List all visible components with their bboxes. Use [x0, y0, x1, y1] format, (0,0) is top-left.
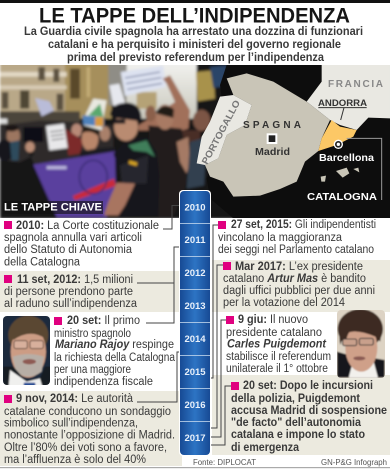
timeline: 2011 — [184, 235, 206, 246]
timeline: 2010 — [184, 202, 206, 214]
buildings — [0, 65, 226, 126]
purple banner — [33, 151, 116, 217]
event: 20 set (Puigdemont): 20 set: Dopo le incursioni — [243, 380, 373, 392]
Madrid marker — [267, 133, 277, 144]
event: 9 nov 2014: 9 nov, 2014: Le autorità — [16, 393, 134, 405]
event: 11 set 2012: di persone prendono parte — [4, 286, 133, 298]
event: 11 set 2012: 11 set, 2012: 1,5 milioni — [17, 274, 133, 286]
event: 27 set 2015: 27 set, 2015: Gli indipendentisti — [231, 219, 376, 231]
Barcelona marker — [334, 140, 343, 149]
event: 27 set 2015: dei seggi nel Parlamento catalano — [218, 244, 374, 256]
event: 9 giu: stabilisce il referendum — [226, 351, 331, 363]
background bands — [0, 218, 390, 468]
event: 11 set 2012: al raduno sull’indipendenza — [4, 298, 138, 310]
map: Catalonia — [318, 120, 357, 151]
Andorra pointer — [318, 108, 367, 120]
connector lines — [137, 206, 231, 445]
panel: protest photo — [0, 62, 240, 219]
event: 2010 — [4, 220, 159, 268]
event: 2010: della Catalogna — [4, 256, 81, 268]
event: 9 giu: unilaterale il 1° ottobre — [226, 363, 328, 375]
map: Balearic islands — [321, 168, 359, 182]
event: 20 set (Rajoy): la richiesta della Catalogna — [54, 352, 176, 364]
event: 20 set (Rajoy): per una maggiore — [54, 364, 131, 376]
photo: Carles Puigdemont — [337, 310, 385, 378]
label: Andorra: ANDORRA — [318, 98, 367, 109]
event: 20 set (Rajoy): 20 set: Il primo — [67, 315, 140, 327]
event: 2010: dello Statuto di Autonomia — [4, 244, 133, 256]
event: 9 nov 2014: ma l’affluenza è solo del 40% — [4, 454, 146, 466]
event: Mar 2017: catalano Artur Mas è bandito — [223, 273, 366, 285]
label: Portogallo: PORTOGALLO — [200, 99, 243, 166]
timeline: 2017 — [184, 433, 206, 444]
source credit: Fonte: DIPLOCAT — [193, 458, 256, 467]
protester — [138, 75, 210, 217]
label: Madrid: Madrid — [255, 147, 290, 158]
event: 20 set (Puigdemont): "de facto" dell’autonomia — [231, 417, 362, 429]
subtitle: La Guardia civile spagnola ha arrestato una dozzina di funzionari — [24, 26, 363, 38]
signs — [0, 65, 166, 150]
event: 20 set (Rajoy): Mariano Rajoy respinge — [55, 339, 174, 351]
event: 20 set (Rajoy): ministro spagnolo — [54, 328, 131, 340]
label: Spagna: SPAGNA — [243, 120, 301, 131]
event: 11 set 2012 — [4, 274, 138, 310]
event: 2010: 2010: La Corte costituzionale — [16, 220, 159, 232]
label: Barcellona: Barcellona — [319, 152, 374, 164]
subtitle: prima del previsto referendum per l’indipendenza — [67, 52, 325, 64]
event: 20 set (Puigdemont): catalana e impone lo stato — [231, 429, 365, 441]
guard — [104, 103, 159, 217]
timeline: 2013 — [184, 301, 206, 312]
event: 9 nov 2014: catalane conducono un sondaggio — [4, 406, 171, 418]
event: 20 set (Rajoy): indipendenza fiscale — [54, 376, 153, 388]
photo: Mariano Rajoy — [3, 316, 50, 385]
timeline — [179, 190, 211, 456]
agency credit: GN-P&G Infograph — [321, 458, 387, 467]
event: 9 giu: 9 giu: Il nuovo — [238, 314, 308, 326]
event: 27 set 2015: vincolano la maggioranza — [218, 232, 343, 244]
event: 9 giu — [226, 314, 331, 375]
event: 27 set 2015 — [218, 219, 376, 256]
title: LE TAPPE DELL’INDIPENDENZA — [39, 4, 350, 28]
event: 20 set (Rajoy) — [54, 315, 176, 388]
subtitle: catalani e ha perquisito i ministeri del governo regionale — [48, 39, 341, 51]
timeline: 2016 — [184, 400, 206, 411]
map: Portugal — [197, 95, 252, 165]
map: Spain — [205, 73, 330, 197]
subtitle — [24, 26, 363, 64]
event: 2010: spagnola annulla vari articoli — [4, 232, 142, 244]
event: 9 giu: presidente catalano — [226, 327, 322, 339]
label: Francia: FRANCIA — [328, 79, 383, 90]
event: Mar 2017: dagli uffici pubblici per due anni — [223, 285, 375, 297]
timeline: 2015 — [184, 367, 206, 378]
event: Mar 2017 — [223, 261, 375, 309]
event: 9 nov 2014: Oltre l’80% dei voti sono a favore, — [4, 442, 167, 454]
event: Mar 2017: Mar 2017: L’ex presidente — [235, 261, 363, 273]
event: 9 nov 2014: simbolico sull’indipendenza, — [4, 418, 138, 430]
timeline: 2014 — [184, 334, 206, 345]
event: 9 nov 2014 — [4, 393, 175, 466]
map — [197, 65, 390, 218]
event: 20 set (Puigdemont) — [231, 380, 387, 454]
event: 20 set (Puigdemont): della polizia, Puigdemont — [231, 393, 360, 405]
label: le tappe chiave: LE TAPPE CHIAVE — [4, 202, 102, 214]
event: 20 set (Puigdemont): di emergenza — [231, 442, 300, 454]
map: France — [307, 65, 390, 130]
event: 9 giu: Carles Puigdemont — [227, 338, 327, 350]
event: Mar 2017: per la votazione del 2014 — [223, 297, 346, 309]
label: Catalogna: CATALOGNA — [307, 191, 377, 203]
timeline: 2012 — [184, 268, 206, 279]
left crowd — [0, 120, 114, 164]
Catalogna leader line — [347, 138, 382, 200]
event: 9 nov 2014: nonostante l’opposizione di Madrid. — [4, 430, 175, 442]
